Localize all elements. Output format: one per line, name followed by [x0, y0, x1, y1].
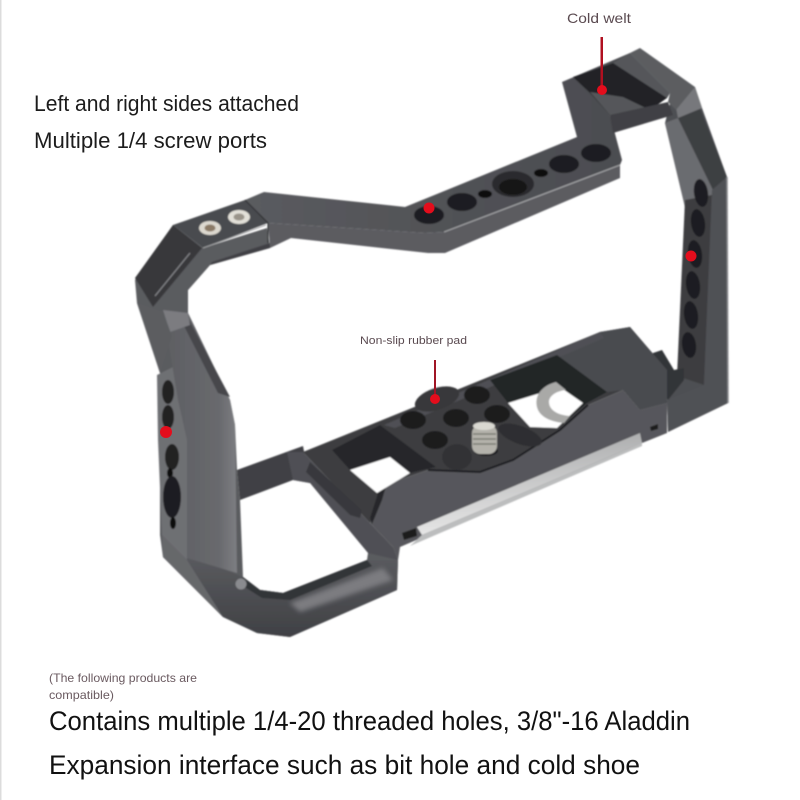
red marker: right upright — [686, 250, 696, 262]
strut and diagonal arm — [237, 446, 310, 500]
plate holes — [464, 386, 490, 404]
plate front rail — [370, 390, 667, 560]
top bar — [173, 48, 695, 253]
text: left and right sides: Left and right sides attached — [34, 91, 299, 116]
grip holes — [162, 380, 174, 404]
silver washer — [536, 382, 570, 423]
text: screw ports: Multiple 1/4 screw ports — [34, 128, 267, 153]
frame silhouette — [135, 225, 398, 637]
plate windows — [332, 425, 436, 473]
text: threaded holes: Contains multiple 1/4-20 threaded holes, 3/8"-16 Aladdin — [49, 706, 690, 736]
main face — [163, 310, 237, 573]
grip lower — [163, 555, 398, 637]
red marker: top bar — [424, 202, 434, 214]
right upright — [640, 87, 728, 432]
red marker: cold shoe — [597, 37, 607, 95]
bar holes — [414, 206, 444, 224]
hex screws — [199, 210, 250, 235]
rubber pads — [412, 381, 462, 417]
left grip upright — [135, 225, 398, 637]
note: compatible products: (The following products are — [49, 671, 197, 685]
note: compatible products — [49, 671, 197, 702]
hole panel — [157, 360, 187, 560]
camera cage photo — [135, 48, 728, 637]
label: non-slip rubber pad: Non-slip rubber pad — [360, 335, 467, 347]
bottom plate — [303, 327, 667, 560]
red marker: left upright — [160, 426, 172, 438]
red marker: rubber pad — [430, 360, 440, 404]
note: compatible products: compatible) — [49, 688, 114, 702]
head dark side — [135, 225, 202, 307]
tripod screw — [472, 422, 498, 456]
text: expansion interface: Expansion interface such as bit hole and cold shoe — [49, 750, 640, 780]
label: cold welt: Cold welt — [567, 10, 631, 26]
cold shoe — [573, 48, 695, 133]
